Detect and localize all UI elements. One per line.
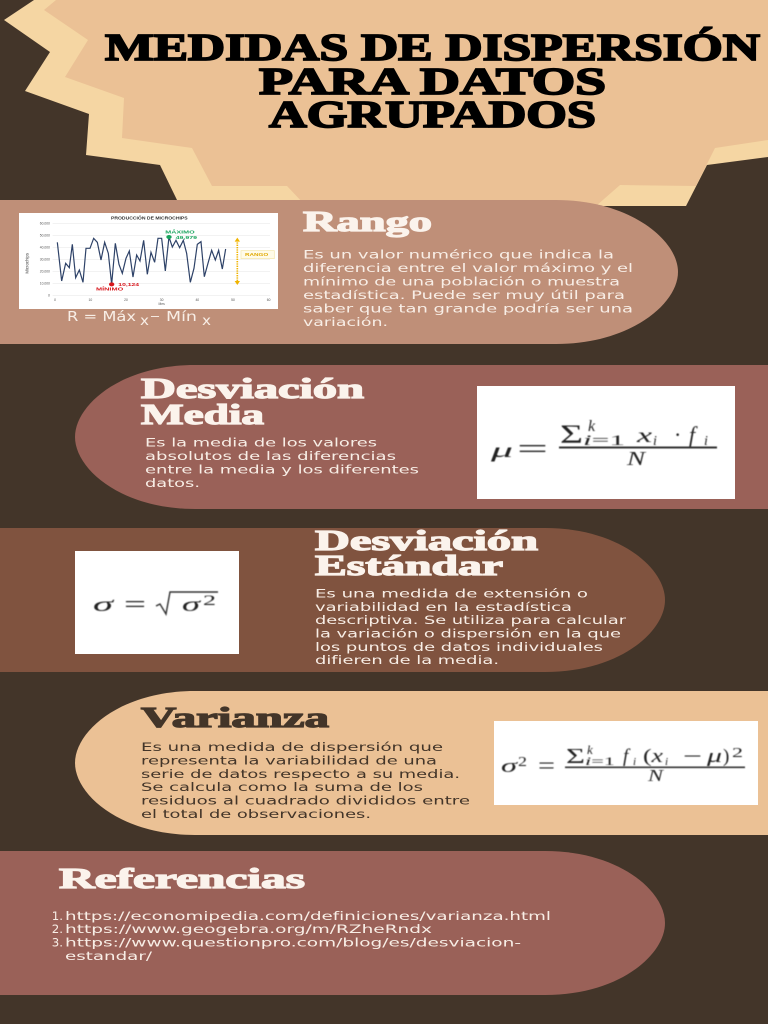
references list: https://www.questionpro.com/blog/es/desviacion- [65,936,521,950]
range formula: – [150,308,160,324]
formula: varianza: k [587,742,593,757]
chart: producción de microchips: Mes [159,302,165,306]
panel: rango [0,200,678,344]
text: rango: diferencia entre el valor máximo y el [303,261,633,275]
panel: referencias [0,851,665,995]
range formula: R = Máx [67,309,136,325]
range formula [67,308,211,329]
formula: sigma [75,551,239,654]
formula: media [477,386,735,499]
formula: media: i =1 [583,433,625,449]
chart: producción de microchips: 20,000 [40,270,50,274]
text: rango: Es un valor numérico que indica la [303,248,614,262]
panel: desviación media [75,365,768,509]
formula: media: μ [489,438,513,462]
heading: desviación estándar: Estándar [315,551,503,582]
title: MEDIDAS DE DISPERSIÓN [105,27,760,69]
chart: producción de microchips: 60,000 [40,222,50,226]
text: rango: mínimo de una población o muestra [303,274,620,288]
text: varianza: serie de datos respecto a su media. [141,767,460,781]
references list: 3. [52,936,63,950]
chart: producción de microchips: MÁXIMO [165,229,195,236]
title: AGRUPADOS [269,94,596,136]
chart: producción de microchips: 0 [48,294,50,298]
chart: producción de microchips: 50,000 [40,234,50,238]
chart: producción de microchips: 0 [54,298,56,302]
heading: desviación media: Media [141,400,264,431]
formula: varianza: ) [723,746,729,767]
text: varianza: Es una medida de dispersión que [141,740,443,754]
formula: media: f [689,422,698,447]
heading: desviación estándar [315,526,539,582]
formula: varianza: 2 [518,755,527,770]
chart: producción de microchips: RANGO [245,252,269,257]
header starburst [4,0,768,206]
text: desviación estándar: la variación o dispersión en la que [315,626,621,640]
text: desviación media: entre la media y los diferentes [145,462,419,476]
text: desviación estándar: los puntos de datos individuales [315,640,603,654]
chart: producción de microchips [19,213,278,309]
chart: producción de microchips: 10 [88,298,92,302]
title: PARA DATOS [259,61,606,103]
range formula: x [140,313,149,329]
title [105,27,760,136]
formula: media: · [674,422,681,447]
formula: varianza [494,721,758,805]
text: desviación media: datos. [145,476,200,490]
formula: varianza: = [538,753,555,778]
formula: varianza: σ [501,756,518,777]
formula: varianza: Σ [566,744,585,768]
chart: producción de microchips: 49,979 [176,235,198,240]
chart: producción de microchips: 60 [267,298,271,302]
references list: 1. [52,909,63,923]
references list [52,909,551,963]
formula: media: k [588,418,596,435]
text: desviación estándar: difieren de la media. [315,653,499,667]
heading: varianza: Varianza [141,703,329,734]
chart: producción de microchips: Microchips [25,253,30,274]
range formula: x [202,313,211,329]
formula: varianza: 2 [732,746,743,761]
formula: sigma: σ [182,594,202,616]
text: varianza: el total de observaciones. [141,807,371,821]
formula: sigma: σ [93,592,116,616]
chart: producción de microchips: 40 [195,298,199,302]
references list: https://www.geogebra.org/m/RZheRndx [65,922,432,936]
formula: varianza: f [623,746,631,767]
formula: varianza: N [647,766,665,785]
text: desviación estándar: variabilidad en la estadística [315,600,572,614]
text: rango [303,248,633,329]
formula: media: Σ [560,420,583,449]
references list: 2. [52,922,63,936]
formula: sigma: = [124,592,146,618]
heading: desviación media: Desviación [141,374,365,405]
chart: producción de microchips: 40,000 [40,246,50,250]
formula: media: x [635,423,653,447]
heading: rango: Rango [303,207,432,238]
text: rango: estadística. Puede ser muy útil para [303,288,625,302]
text: varianza: residuos al cuadrado divididos entre [141,794,470,808]
formula: varianza: i [665,756,668,768]
formula: varianza: i=1 [585,754,615,768]
formula: sigma: 2 [203,593,216,609]
heading: desviación media [141,374,365,431]
formula: varianza: (x [643,746,664,767]
chart: producción de microchips: 30 [160,298,164,302]
panel: varianza [75,691,768,835]
chart: producción de microchips: 10,000 [40,282,50,286]
text: desviación media: Es la media de los valores [145,436,377,450]
heading: referencias: Referencias [59,864,305,895]
references list: estandar/ [65,949,152,963]
text: desviación estándar: descriptiva. Se utiliza para calcular [315,613,626,627]
references list: https://economipedia.com/definiciones/varianza.html [65,909,551,923]
text: varianza: representa la variabilidad de una [141,754,437,768]
chart: producción de microchips: 50 [231,298,235,302]
formula: varianza: − [683,744,702,768]
formula: varianza: μ [705,746,722,767]
text: desviación media [145,436,419,490]
formula: media: i [653,434,657,449]
text: rango: saber que tan grande podría ser una [303,302,633,316]
chart: producción de microchips: PRODUCCIÓN DE MICROCHIPS [111,216,188,221]
formula: varianza: i [633,756,636,768]
chart: producción de microchips: 30,000 [40,258,50,262]
panel: desviación estándar [0,526,665,672]
text: desviación estándar: Es una medida de extensión o [315,586,588,600]
heading: desviación estándar: Desviación [315,526,539,557]
chart: producción de microchips: 20 [124,298,128,302]
range formula: Mín [166,309,197,325]
text: desviación media: absolutos de las diferencias [145,449,396,463]
formula: media: = [517,434,548,465]
chart: producción de microchips: MÍNIMO [96,285,123,293]
text: rango: variación. [303,315,388,329]
formula: media: i [704,434,708,449]
formula: media: N [626,448,647,470]
chart: producción de microchips: 10,124 [118,282,140,287]
text: desviación estándar [315,586,626,667]
text: varianza [141,740,470,821]
text: varianza: Se calcula como la suma de los [141,780,423,794]
